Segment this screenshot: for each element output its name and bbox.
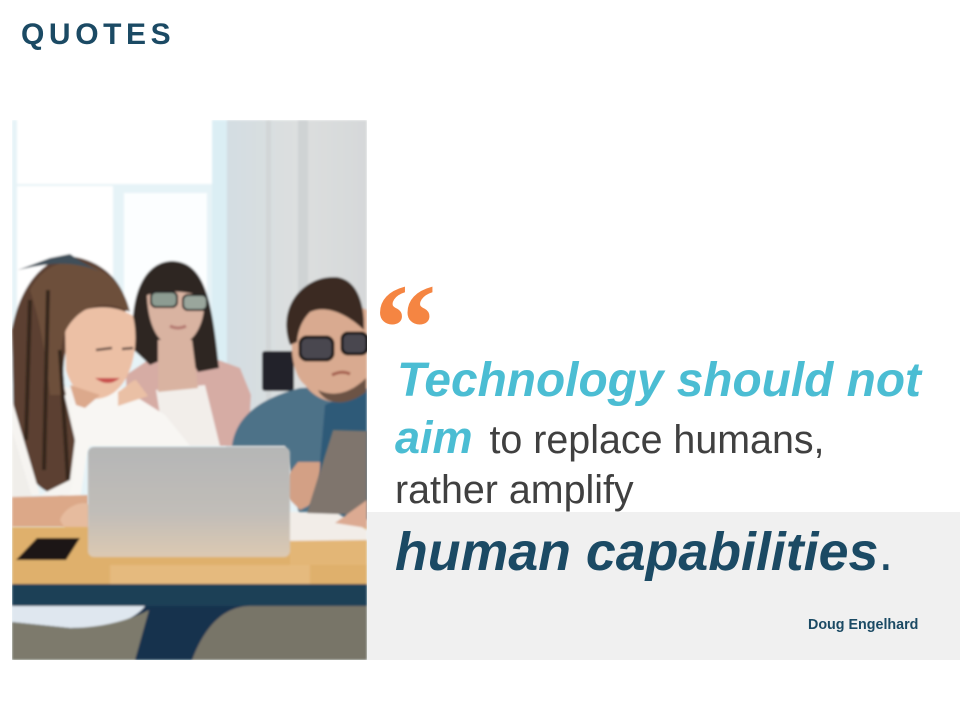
camera behind man: [262, 351, 294, 391]
panel: grey quote band: [367, 512, 960, 660]
hoodie: [12, 385, 190, 496]
man's hand: [285, 462, 320, 510]
man: [232, 385, 367, 520]
lower bodies: [12, 606, 367, 660]
quote line 3: rather amplify: [395, 468, 634, 512]
laptop: [88, 447, 290, 557]
papers: [283, 512, 367, 541]
table: [12, 527, 367, 584]
icon: orange quotation mark: “: [374, 260, 436, 398]
quote text: [395, 354, 922, 582]
face: [65, 307, 135, 399]
photo: three colleagues around a laptop: [12, 120, 367, 660]
title: QUOTES: [21, 18, 175, 51]
quote line 4: human capabilities.: [395, 522, 893, 582]
phone: [16, 538, 80, 560]
quote line 1: Technology should not: [397, 354, 921, 407]
woman in front: hair back: [12, 257, 128, 496]
quote line 2: aim to replace humans,: [395, 412, 825, 463]
attribution: Doug Engelhard: [808, 617, 918, 633]
tablet: [307, 430, 367, 515]
woman in back: [126, 352, 251, 446]
